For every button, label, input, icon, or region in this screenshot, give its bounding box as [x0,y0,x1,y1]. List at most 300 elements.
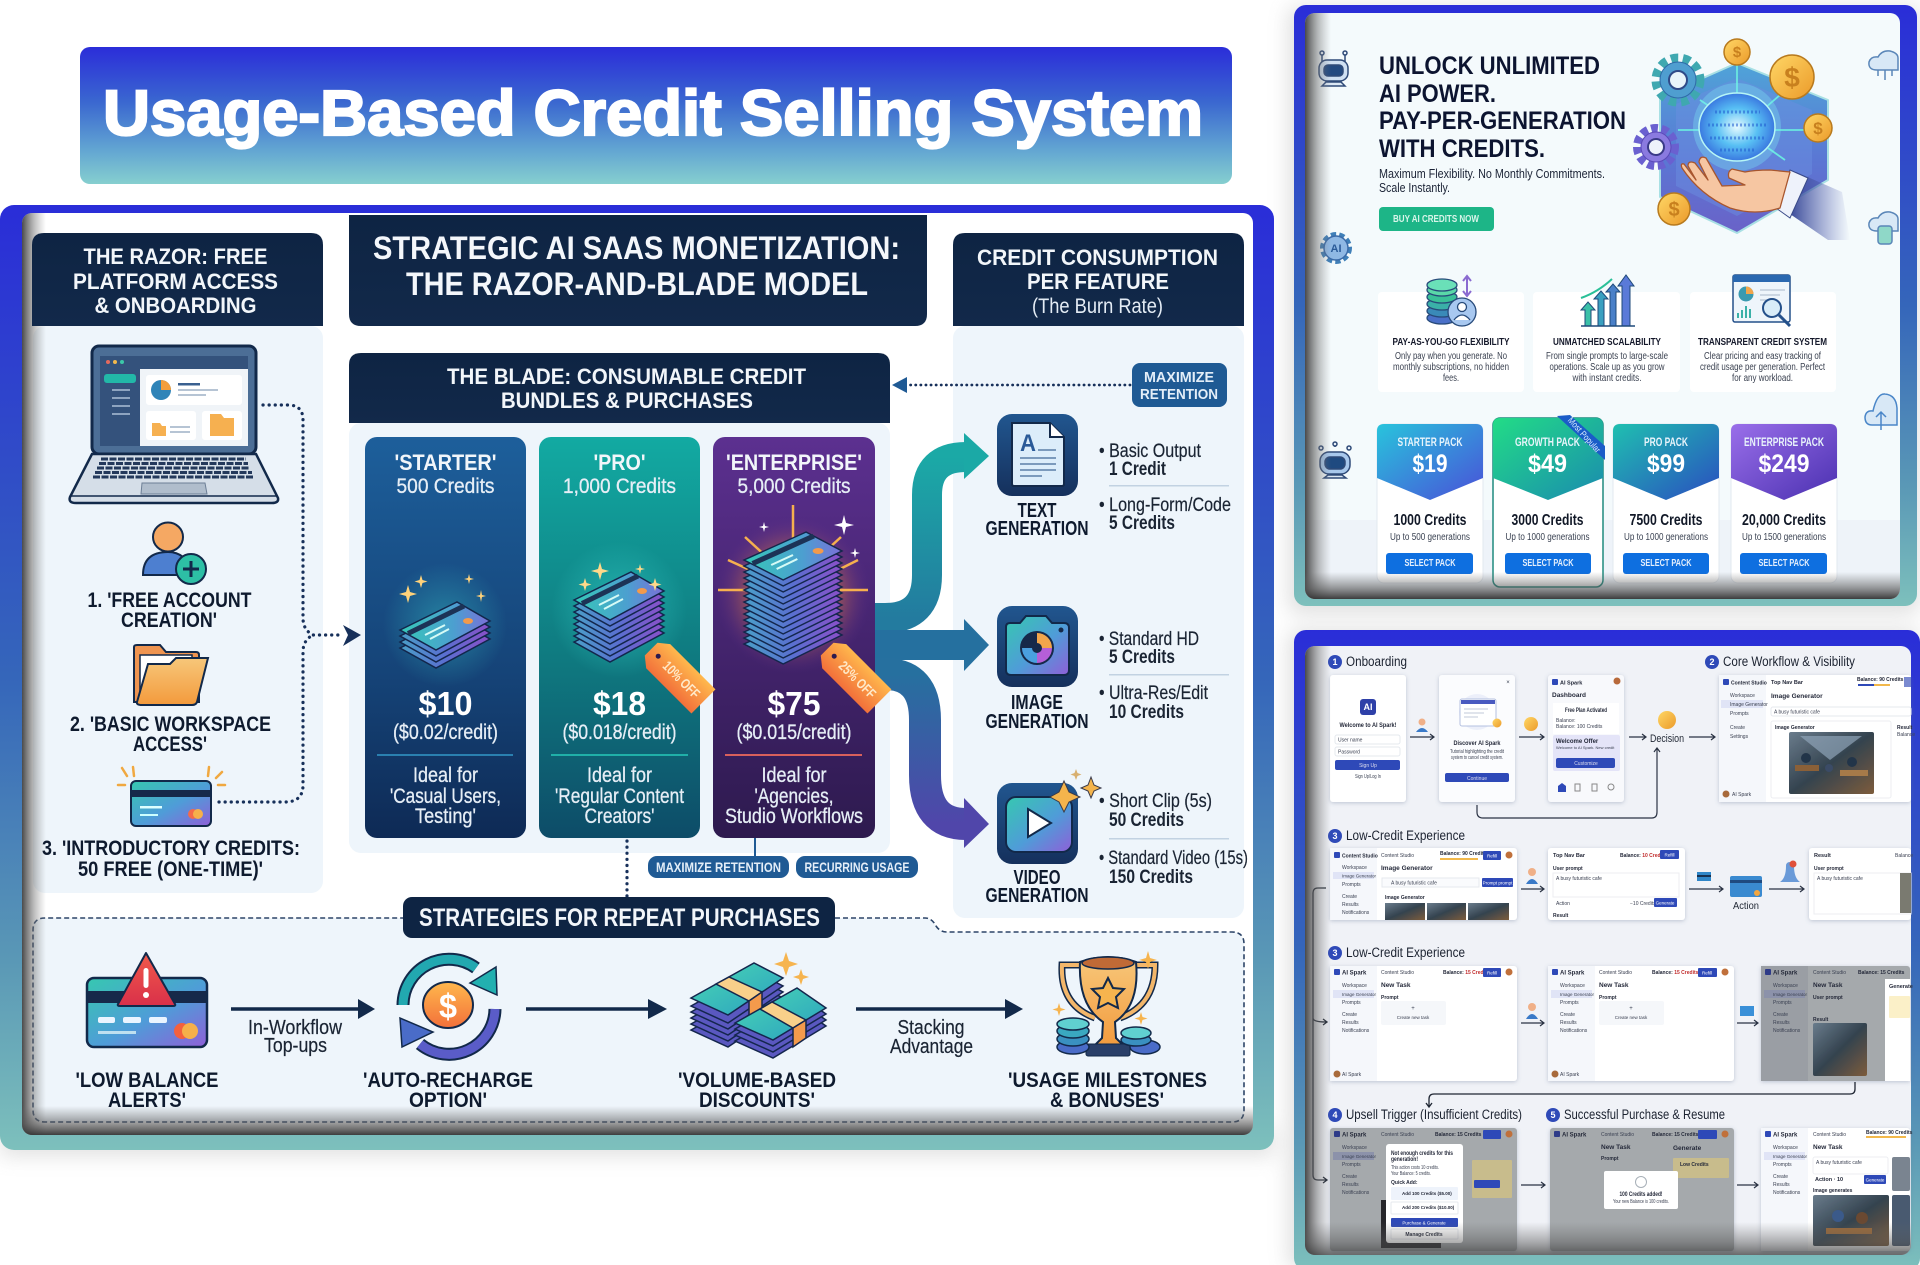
label: volume based discounts: 'VOLUME-BASED [678,1069,836,1092]
arrow: purchase to resume [1737,1182,1758,1188]
label: introductory credits: 50 FREE (ONE-TIME)' [78,858,263,881]
screen: credits added: New Task [1601,1144,1631,1151]
arrow: task two to generate [1737,1006,1758,1026]
pricing card: starter pack: 1000 Credits [1394,512,1467,529]
hero subtext [1379,166,1605,195]
feature: transparent credit system [1690,275,1836,392]
screen: upsell modal: Workspace [1342,1145,1367,1151]
section heading: onboarding [1328,654,1407,669]
screen: top nav bar prompt: −10 Credits [1630,901,1656,907]
screen: dimmed low credit result: Create [1773,1012,1788,1018]
arrow: stacking advantage: Advantage [890,1036,973,1058]
card: enterprise: Ideal for [762,764,826,787]
modal: not enough credits: generation! [1391,1156,1418,1163]
screen: top nav bar prompt: Action [1556,901,1570,907]
pricing card: growth pack [1493,415,1605,587]
card: starter: 'STARTER' [394,450,496,475]
icon: auto recharge: $ [439,988,457,1026]
modal: 100 credits added: 100 Credits added! [1620,1191,1662,1198]
modal: not enough credits: Manage Credits [1405,1232,1443,1238]
screen: dashboard: Customize [1574,761,1598,767]
feature: pay as you go: fees. [1443,373,1459,384]
screen: new task one [1330,966,1517,1081]
feature: transparent credit system: Clear pricing and easy tracking of [1704,351,1821,362]
card: starter: $10 [418,685,472,722]
screen: resumed generation: Action · 10 [1815,1177,1843,1183]
screen: dimmed low credit result: AI Spark [1773,970,1798,976]
screen: dimmed low credit result: New Task [1813,982,1843,989]
screen: discover AI spark: × [1506,680,1510,686]
arrow: in-workflow top-ups: Top-ups [264,1035,327,1057]
screen: resumed generation: A busy futuristic cafe [1816,1160,1862,1166]
arrow: in-workflow top-ups: In-Workflow [248,1017,342,1039]
title banner: Usage-Based Credit Selling System [103,77,1203,149]
screen: content studio low balance: Balance: 90 Credits [1440,851,1487,857]
text: image generation credit list [1099,629,1229,723]
screen: content studio low balance: Image Generator [1381,865,1433,872]
ribbon: most popular: Most Popular [1566,415,1603,455]
label: text generation: TEXT [1018,500,1056,522]
screen: discover AI spark: system to cancel credit system. [1451,755,1503,761]
label: video generation: VIDEO [1014,867,1060,889]
feature: unmatched scalability: From single prompts to large-scale [1546,351,1668,362]
pricing card: pro pack: 7500 Credits [1630,512,1703,529]
feature: transparent credit system: credit usage per generation. Perfect [1700,362,1825,373]
pricing card: enterprise pack: ENTERPRISE PACK [1744,435,1824,449]
left column header [32,233,323,326]
screen: content studio low balance: Prompt prompt [1483,880,1513,886]
screen: login: Sign Up/Log In [1355,774,1381,780]
pricing card: pro pack: SELECT PACK [1640,558,1692,569]
screen: content studio low balance: Workspace [1342,865,1367,871]
screen: top nav bar prompt: A busy futuristic cafe [1556,876,1602,882]
photos: generated thumbnails [1385,903,1509,920]
section heading: core workflow: 2 [1709,657,1715,667]
decision step: Decision [1650,733,1684,745]
hand and sleeve [1681,157,1850,240]
screen: dimmed low credit result: Result [1813,1017,1829,1023]
screen: new task one: Workspace [1342,983,1367,989]
icon: robot blue [1319,442,1351,478]
screen: top nav bar prompt: Result [1553,913,1569,919]
card: starter: Ideal for [413,764,478,787]
screen: resumed generation: Create [1773,1174,1788,1180]
hero heading: UNLOCK UNLIMITED [1379,52,1600,80]
icon: cloud upload [1865,394,1897,430]
screen: credits added: Content Studio [1601,1132,1634,1138]
icon: folder [134,645,208,705]
screen: dimmed low credit result: Prompts [1773,1000,1792,1006]
photo: busy cafe [1789,732,1874,794]
hero heading: AI POWER. [1379,80,1496,108]
label: usage milestones and bonuses: & BONUSES' [1050,1089,1164,1112]
section heading: upsell trigger: Upsell Trigger (Insufficient Credits) [1346,1107,1522,1122]
label: text generation [986,500,1088,540]
screen: new task one: Notifications [1342,1028,1370,1034]
screen: new task two: AI Spark [1560,970,1585,976]
screen: dimmed low credit result [1761,966,1913,1081]
label: image generation [986,692,1088,733]
icon: auto recharge [400,959,497,1054]
card: enterprise: Studio Workflows [725,805,863,828]
label: video generation: GENERATION [986,885,1088,907]
icon: text document [997,414,1078,496]
screen: new task two: Create new task [1615,1015,1648,1020]
arrow: dotted feedback to blade [892,377,1130,393]
screen: new task two: New Task [1599,982,1629,989]
card: pro: $18 [593,685,646,722]
screen: new task two: Results [1560,1020,1577,1026]
modal: not enough credits: Add 100 Credits ($5.00) [1402,1191,1452,1196]
section heading: onboarding: 1 [1332,657,1338,667]
icon: trophy with coins [1052,951,1160,1056]
card: enterprise: ($0.015/credit) [736,721,852,744]
icon: cloud network [1869,51,1898,80]
screen: core workflow: AI Spark [1732,792,1752,798]
icon: dashboard with magnifier [1733,275,1790,326]
text: text generation credit list: 5 Credits [1109,513,1175,534]
label: basic workspace access [70,713,271,756]
icon: text document: A [1020,430,1036,457]
callout: maximize retention: RETENTION [1140,386,1218,403]
modal: not enough credits: This action costs 10 credits. [1391,1165,1439,1171]
icon: growth arrows [1581,275,1635,326]
modal: not enough credits: Purchase & Generate [1402,1220,1446,1226]
coin symbols: $ [1733,44,1742,61]
screen: dashboard [1548,675,1624,802]
screen: new task two: Prompts [1560,1000,1579,1006]
pricing card: enterprise pack: SELECT PACK [1758,558,1810,569]
arrow head: video generation [964,798,989,848]
pricing card: growth pack: Up to 1000 generations [1506,532,1590,543]
text: text generation credit list: • Long-Form/Code [1099,495,1231,516]
screen: core workflow: Settings [1730,734,1749,740]
flow arrows to features [860,433,989,848]
section heading: successful purchase: Successful Purchase & Resume [1564,1107,1725,1122]
screen: new task one: New Task [1381,982,1411,989]
text: text generation credit list: 1 Credit [1109,459,1167,480]
feature: transparent credit system: TRANSPARENT CREDIT SYSTEM [1698,337,1827,348]
screen: core workflow [1719,675,1915,802]
screen: content studio low balance: Prompts [1342,882,1361,888]
card: enterprise: $75 [768,685,820,722]
badge: recurring usage: RECURRING USAGE [804,859,910,875]
screen: resumed generation: Balance: 90 Credits [1866,1130,1913,1136]
screen: new task one: Create new task [1397,1015,1430,1020]
button: buy AI credits now [1379,207,1494,231]
label: free account creation: CREATION' [121,609,217,632]
hero subtext: Scale Instantly. [1379,180,1450,195]
screen: core workflow: Prompts [1730,711,1749,717]
section heading: onboarding: Onboarding [1346,654,1407,669]
screen: content studio low balance: Results [1342,902,1359,908]
left column header: & ONBOARDING [94,293,256,318]
action step: Action [1733,901,1759,912]
blade header [349,353,890,423]
pricing card: starter pack: SELECT PACK [1404,558,1456,569]
screen: new task two: Create [1560,1012,1575,1018]
screen: dimmed low credit result: Content Studio [1813,970,1846,976]
modal: not enough credits: Your Balance: 5 credits. [1391,1171,1431,1177]
icon: large credit stack [744,532,842,664]
screen: upsell modal: AI Spark [1342,1132,1367,1138]
icon: credit card with rays [118,767,225,826]
screen: upsell modal: Notifications [1342,1190,1370,1196]
screen: dashboard: Balance: [1556,718,1575,724]
screen: content studio low balance: Notifications [1342,910,1370,916]
badge: maximize retention: MAXIMIZE RETENTION [656,859,781,875]
screen: credits added: Prompt [1601,1156,1619,1162]
section heading: low-credit experience: 3 [1332,831,1338,841]
text: video generation credit list: 50 Credits [1109,810,1184,831]
label: auto recharge option [363,1069,533,1112]
hero heading [1379,52,1626,163]
label: auto recharge option: OPTION' [409,1089,487,1112]
text: video generation credit list: • Standard Video (15s) [1099,848,1248,869]
screen: content studio low balance: Image Generator [1342,874,1377,878]
screen: core workflow: Content Studio [1731,680,1767,686]
card: pro: 'Regular Content [555,785,684,808]
screen: resumed generation: Image Generator [1773,1154,1808,1159]
icon: new user [143,522,206,584]
screen: dimmed low credit result: Results [1773,1020,1790,1026]
screen: content studio low balance: Refill [1487,854,1497,858]
screen: new task two: + [1629,1006,1633,1012]
hero heading: PAY-PER-GENERATION [1379,107,1626,135]
photo: dark backdrop [1381,1200,1441,1248]
tag: 10 percent off: 10% OFF [660,658,704,702]
icon: teal gear [1657,59,1699,101]
screen: login: User name [1338,738,1363,744]
arrow: upsell to purchase [1521,1182,1545,1188]
screen: login: Welcome to AI Spark! [1340,722,1396,729]
screen: new task one: Balance: 15 Credits [1443,970,1490,976]
pricing card: starter pack [1377,424,1483,583]
feature: pay as you go [1378,276,1524,392]
heading: strategies for repeat purchases [403,897,835,938]
panel: user flow wireframes [1294,630,1920,1265]
arrow: stacking advantage: Stacking [898,1017,964,1039]
panel: credits landing page [1294,5,1917,606]
right column header: (The Burn Rate) [1032,295,1163,318]
screen: new task one: Create [1342,1012,1357,1018]
screen: result [1809,848,1913,920]
icon: laptop [70,346,278,503]
feature: pay as you go: monthly subscriptions, no hidden [1393,362,1509,373]
screen: new task one: Results [1342,1020,1359,1026]
screen: login [1330,675,1406,802]
screen: resumed generation: Generate [1866,1178,1885,1182]
card: pro: 'PRO' [594,450,646,475]
section heading: low-credit experience second row: 3 [1332,948,1338,958]
section heading: upsell trigger: 4 [1332,1110,1338,1120]
text: image generation credit list: 10 Credits [1109,702,1184,723]
card: starter: 500 Credits [396,475,494,498]
screen: discover AI spark [1439,675,1515,802]
label: volume based discounts: DISCOUNTS' [699,1089,815,1112]
label: image generation: IMAGE [1011,692,1063,714]
screen: dimmed low credit result: Generate [1889,984,1913,990]
callout: maximize retention [1132,363,1227,407]
screen: new task two: Image Generator [1560,992,1595,997]
label: auto recharge option: 'AUTO-RECHARGE [363,1069,533,1092]
left column header: PLATFORM ACCESS [73,269,278,294]
screen: result: Balance [1895,853,1913,859]
right column header [953,233,1244,326]
card: starter: 'Casual Users, [390,785,501,808]
action step [1689,860,1804,912]
screen: login: Password [1338,750,1360,756]
panel: razor and blade model infographic [0,205,1274,1150]
screen: new task one: Image Generator [1342,992,1377,997]
card: enterprise: 'Agencies, [754,785,834,808]
card: pro: 1,000 Credits [563,475,676,498]
arrow: login to discover [1410,718,1434,740]
icon: gear with AI [1323,235,1349,261]
screen: new task two: Workspace [1560,983,1585,989]
screen: discover AI spark: Continue [1467,776,1487,782]
screen: resumed generation: Image generates [1813,1188,1853,1194]
arrow: stacking advantage [856,999,1023,1058]
section heading: low-credit experience: Low-Credit Experience [1346,828,1465,843]
screen: new task one: Prompt [1381,995,1399,1001]
arrow: in-workflow top-ups [231,999,375,1057]
connector: to upsell trigger [1426,1082,1855,1107]
text: video generation credit list: • Short Clip (5s) [1099,791,1212,812]
pricing card: enterprise pack: Up to 1500 generations [1742,532,1826,543]
dotted connector lines below cards [625,841,629,897]
screen: top nav bar prompt [1548,848,1685,920]
arrow head: image generation [964,619,989,671]
feature: unmatched scalability: operations. Scale up as you grow [1550,362,1665,373]
label: image generation: GENERATION [986,711,1088,733]
card: enterprise: 5,000 Credits [738,475,850,498]
section heading: low-credit experience second row: Low-Credit Experience [1346,945,1465,960]
left column header: THE RAZOR: FREE [84,244,268,269]
screen: upsell modal: Image Generator [1342,1154,1377,1159]
pricing card: enterprise pack: $249 [1758,450,1810,478]
icon: medium credit stack [574,572,664,662]
label: usage milestones and bonuses: 'USAGE MILESTONES [1008,1069,1207,1092]
label: introductory credits: 3. 'INTRODUCTORY CREDITS: [42,837,300,860]
pricing card: growth pack: SELECT PACK [1522,558,1574,569]
label: introductory credits [42,837,300,881]
screen: dashboard: Welcome Offer [1556,739,1599,745]
feature: pay as you go: PAY-AS-YOU-GO FLEXIBILITY [1392,337,1510,348]
screen: dashboard: Dashboard [1552,692,1586,699]
screen: new task one: Prompts [1342,1000,1361,1006]
card: starter: ($0.02/credit) [393,721,498,744]
blade header: THE BLADE: CONSUMABLE CREDIT [447,364,807,389]
card: starter [365,437,526,838]
screen: upsell modal: Create [1342,1174,1357,1180]
screen: upsell modal: Prompts [1342,1162,1361,1168]
coin symbols: $ [1668,199,1680,221]
screen: credits added [1550,1128,1734,1251]
section heading: core workflow: Core Workflow & Visibility [1723,654,1855,669]
screen: dimmed low credit result: Image Generator [1773,992,1808,997]
modal: 100 credits added: Your new Balance is 100 credits. [1613,1199,1669,1205]
screen: new task two: Balance: 15 Credits [1652,970,1699,976]
screen: resumed generation: Results [1773,1182,1790,1188]
label: basic workspace access: ACCESS' [133,733,207,756]
tag: 10 percent off [639,637,715,713]
label: low balance alerts: 'LOW BALANCE [76,1069,218,1092]
screen: core workflow: Workspace [1730,693,1755,699]
pricing card: growth pack: $49 [1528,450,1567,478]
screen: resumed generation: Notifications [1773,1190,1801,1196]
card: enterprise [713,437,875,838]
text: video generation credit list: 150 Credits [1109,867,1193,888]
screen: top nav bar prompt: User prompt [1553,866,1583,872]
pricing card: pro pack: Up to 1000 generations [1624,532,1708,543]
screen: top nav bar prompt: Generate [1656,900,1675,906]
screen: result: User prompt [1814,866,1844,872]
label: low balance alerts [76,1069,218,1112]
coin and arrow to dashboard [1519,717,1544,740]
pricing card: pro pack [1613,424,1719,583]
screen: core workflow: Create [1730,725,1745,731]
screen: resumed generation [1761,1128,1913,1251]
pricing card: enterprise pack [1731,424,1837,583]
screen: resumed generation: Content Studio [1813,1132,1846,1138]
center main heading [349,215,927,326]
screen: new task two: AI Spark [1560,1072,1580,1078]
screen: new task two [1548,966,1734,1081]
label: basic workspace access: 2. 'BASIC WORKSPACE [70,713,271,736]
screen: result: A busy futuristic cafe [1817,876,1863,882]
card: pro: ($0.018/credit) [562,721,676,744]
blade header: BUNDLES & PURCHASES [501,388,753,413]
pricing card: pro pack: PRO PACK [1644,435,1688,449]
screen: dimmed low credit result: User prompt [1813,995,1843,1001]
arrow: to volume discounts [526,999,667,1019]
screen: upsell modal: Balance: 15 Credits [1435,1132,1482,1138]
arrow: low balance to prompt [1521,868,1544,892]
pricing card: growth pack: 3000 Credits [1512,512,1584,529]
screen: result: Result [1814,853,1831,859]
screen: login: Sign Up [1359,763,1377,769]
screen: content studio low balance [1330,848,1517,920]
screen: resumed generation: AI Spark [1773,1132,1798,1138]
connector: left side flow line [1313,888,1327,1183]
pricing card: growth pack: GROWTH PACK [1515,435,1580,449]
heading: strategies for repeat purchases: STRATEGIES FOR REPEAT PURCHASES [419,904,820,932]
callout: maximize retention: MAXIMIZE [1144,369,1214,386]
screen: dimmed low credit result: Workspace [1773,983,1798,989]
arrow: blue to image generation [860,630,966,660]
right column header: CREDIT CONSUMPTION [977,245,1218,270]
arrow: dotted onboarding connector [219,405,361,802]
text: video generation credit list [1099,791,1248,888]
pricing card: pro pack: $99 [1647,450,1685,478]
arrow: task one to task two [1521,1003,1544,1026]
feature: transparent credit system: for any workload. [1732,373,1793,384]
screen: credits added: Balance: 15 Credits [1652,1132,1699,1138]
icon: gear with AI: AI [1330,243,1342,255]
screen: new task one: AI Spark [1342,970,1367,976]
center main heading: THE RAZOR-AND-BLADE MODEL [406,266,868,302]
screen: top nav bar prompt: Refill [1664,852,1675,858]
screen: top nav bar prompt: Balance: 10 Credits [1620,853,1667,859]
icon: purple gear [1638,129,1674,165]
card: pro: Ideal for [587,764,652,787]
screen: core workflow: A busy futuristic cafe [1774,710,1820,716]
screen: core workflow: Image Generator [1730,702,1768,708]
screen: new task two: Refill [1702,970,1712,976]
screen: top nav bar prompt: Top Nav Bar [1553,853,1586,859]
screen: core workflow: Balance [1897,732,1915,738]
